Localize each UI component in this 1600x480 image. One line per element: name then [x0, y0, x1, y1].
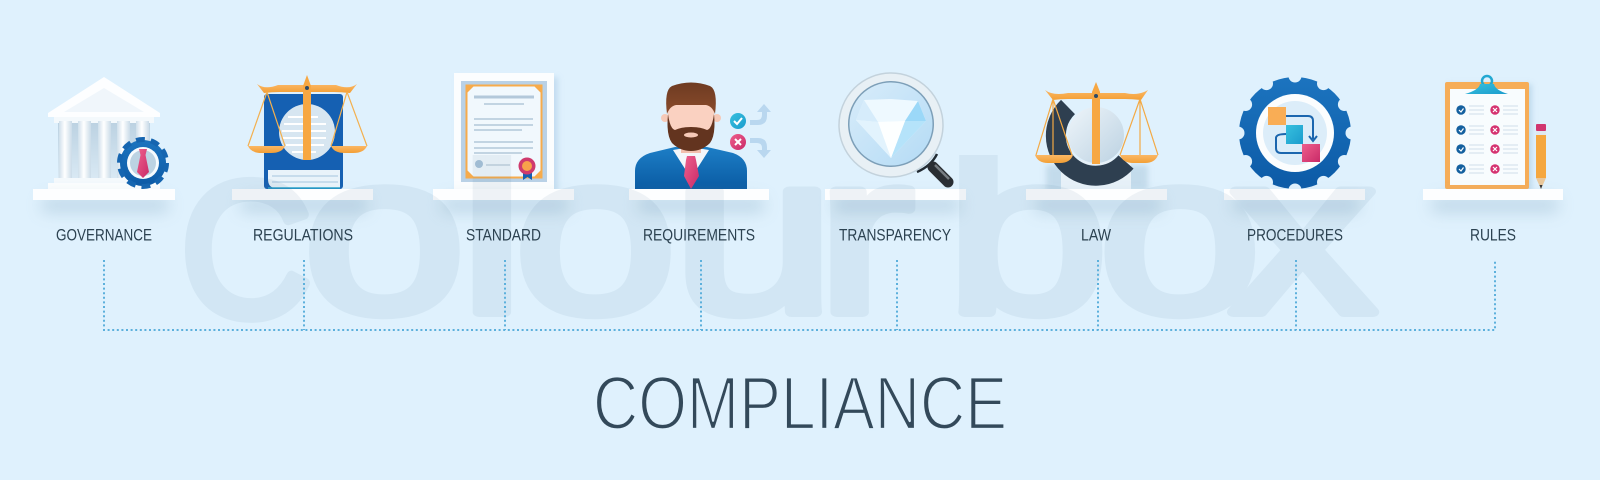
orange square — [1268, 107, 1286, 125]
shelf: transparency — [825, 189, 966, 212]
dotted connector — [104, 260, 1495, 330]
icon: rules clipboard and pencil — [1445, 76, 1546, 192]
label: law: LAW — [1081, 226, 1111, 244]
building columns — [48, 117, 160, 189]
watermark: C — [181, 142, 312, 357]
book — [264, 94, 343, 189]
gear with tie — [120, 140, 166, 186]
head — [661, 82, 721, 153]
scales — [1035, 82, 1158, 164]
handle — [917, 154, 949, 182]
label: requirements: REQUIREMENTS — [643, 226, 755, 244]
watermark: olourbox — [303, 107, 1376, 361]
suit — [635, 147, 747, 189]
cross badge — [730, 134, 746, 150]
clipboard board — [1445, 82, 1532, 192]
icon: standard certificate — [454, 73, 558, 193]
certificate text lines — [474, 97, 534, 153]
scales — [248, 75, 367, 160]
diamond — [856, 99, 926, 158]
dark arc — [1056, 107, 1126, 176]
label: rules: RULES — [1470, 226, 1516, 244]
cross marks — [1490, 105, 1500, 174]
stamp — [475, 160, 510, 168]
shelf: requirements — [629, 189, 769, 212]
pedestal shade — [1046, 165, 1148, 191]
icon: procedures gear — [1232, 70, 1358, 196]
icon: requirements man — [635, 82, 771, 189]
pedestal — [1061, 160, 1131, 189]
lens ring — [839, 73, 943, 177]
title: COMPLIANCE — [593, 361, 1007, 445]
building pediment — [48, 77, 160, 117]
check marks — [1456, 105, 1466, 174]
label: procedures: PROCEDURES — [1247, 226, 1343, 244]
label: transparency: TRANSPARENCY — [839, 226, 951, 244]
up arrow — [750, 104, 771, 125]
shelf: law — [1026, 189, 1167, 212]
watermark — [185, 155, 1379, 323]
certificate frame — [466, 85, 542, 178]
connector arrows — [1276, 116, 1317, 153]
icon: governance building with gear — [48, 77, 166, 189]
pink square — [1302, 144, 1320, 162]
shelf: rules — [1423, 189, 1563, 212]
pencil — [1536, 124, 1546, 189]
down arrow — [750, 138, 771, 158]
check badge — [730, 113, 746, 129]
list lines — [1469, 106, 1518, 173]
icon: regulations book and scales — [248, 75, 367, 189]
label: regulations: REGULATIONS — [253, 226, 353, 244]
shirt and tie — [673, 147, 709, 189]
shelf: regulations — [232, 189, 373, 212]
clip — [1465, 76, 1508, 94]
seal ribbon — [518, 158, 536, 180]
gear — [1232, 70, 1358, 196]
shelf: procedures — [1224, 189, 1365, 212]
icon: transparency magnifier with diamond — [839, 73, 949, 182]
shelf: governance — [33, 189, 175, 212]
grey disc — [1068, 107, 1124, 163]
label: standard: STANDARD — [466, 226, 541, 244]
shelf: standard — [433, 189, 574, 212]
icon: law scales with C shape — [1035, 82, 1158, 191]
label: governance: GOVERNANCE — [56, 226, 152, 244]
teal square — [1286, 125, 1303, 144]
